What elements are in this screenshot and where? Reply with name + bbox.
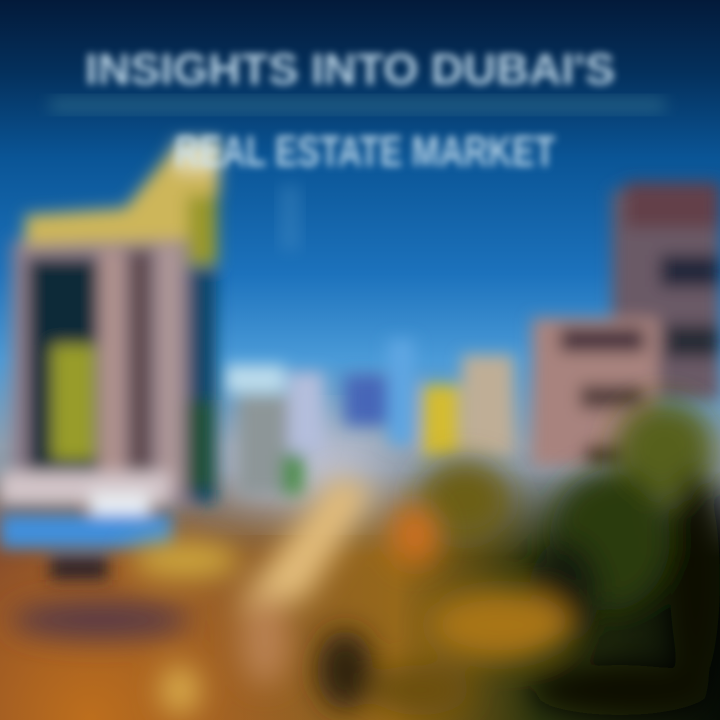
title text (85, 45, 615, 176)
title line 1: INSIGHTS INTO DUBAI'S (85, 45, 615, 94)
antenna (280, 185, 300, 250)
left tower (0, 140, 221, 505)
road light streaks (10, 475, 439, 715)
title underline (50, 98, 665, 112)
title line 2: REAL ESTATE MARKET (175, 127, 555, 176)
left tower base (0, 492, 172, 580)
warm foreground at lower left (0, 490, 320, 720)
horizon haze (220, 430, 390, 500)
trees (317, 400, 720, 715)
right buildings (532, 182, 720, 466)
ground base (0, 470, 720, 720)
distant buildings (225, 340, 514, 495)
